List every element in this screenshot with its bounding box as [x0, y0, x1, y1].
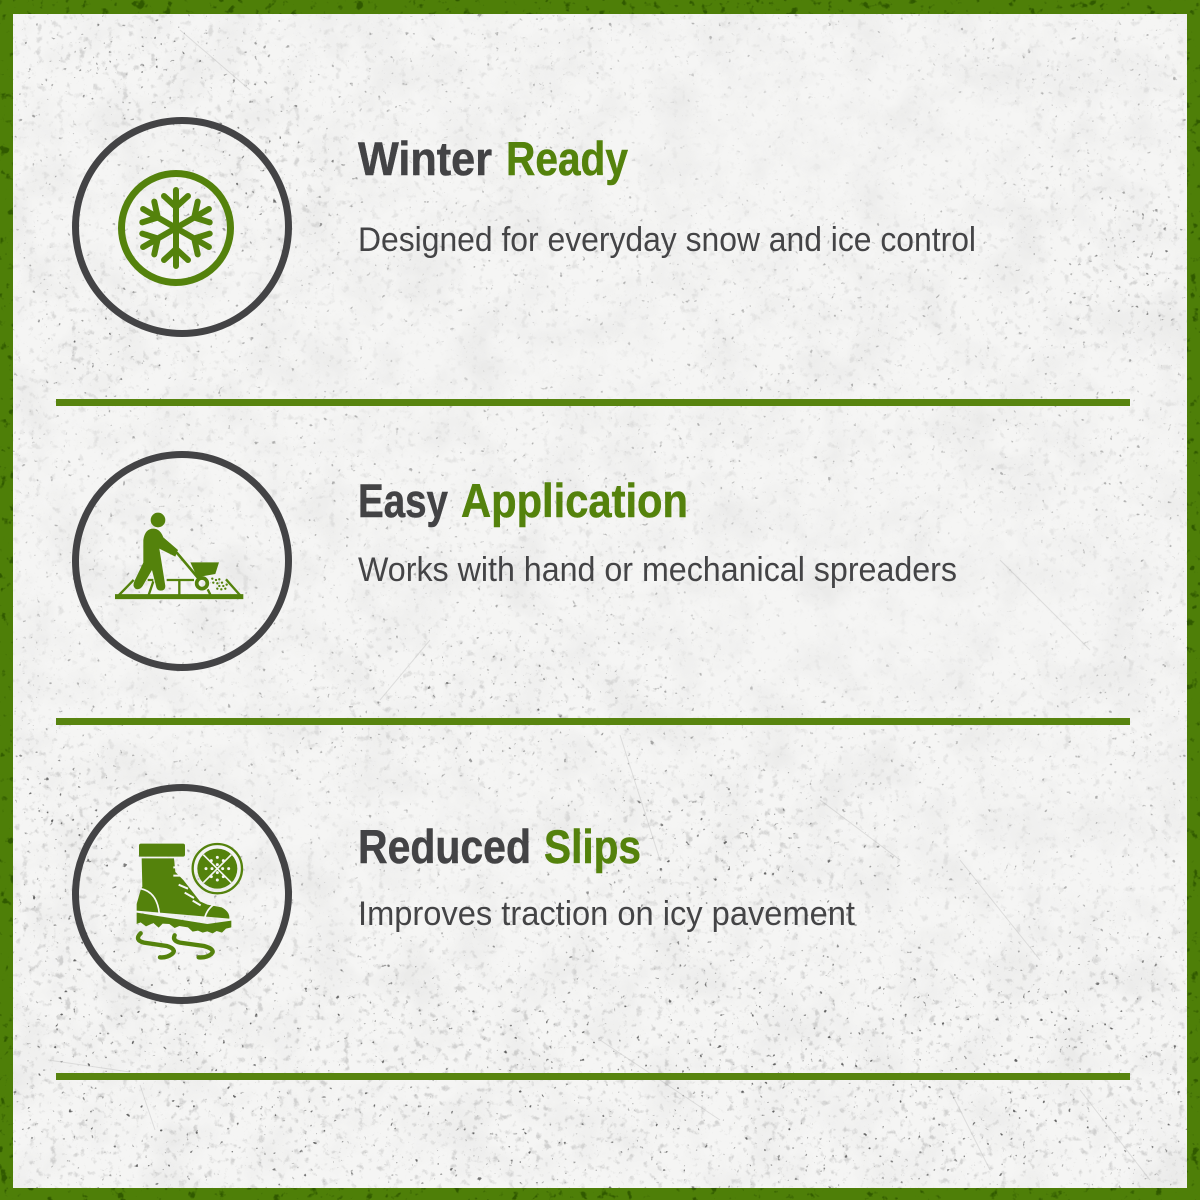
text: easy application description: Works with hand or mechanical spreaders — [358, 551, 957, 589]
icon: boot with tread in ring — [76, 788, 288, 1000]
panel: reduced slips — [76, 788, 856, 1000]
heading: reduced slips: Reduced — [358, 820, 531, 873]
heading: reduced slips: Slips — [544, 820, 641, 873]
icon: snowflake in ring — [76, 120, 288, 334]
heading: winter ready: Winter — [358, 132, 492, 185]
heading: winter ready — [358, 132, 628, 185]
icon: person with spreader in ring — [76, 454, 288, 668]
panel: easy application — [76, 454, 957, 668]
heading: easy application: Easy — [358, 474, 448, 527]
panel: winter ready — [76, 120, 976, 334]
heading: easy application — [358, 474, 688, 527]
text: reduced slips description: Improves traction on icy pavement — [358, 895, 856, 933]
heading: easy application: Application — [461, 474, 688, 527]
heading: winter ready: Ready — [506, 132, 628, 185]
text: winter ready description: Designed for everyday snow and ice control — [358, 221, 976, 259]
divider lines — [56, 399, 1130, 1080]
